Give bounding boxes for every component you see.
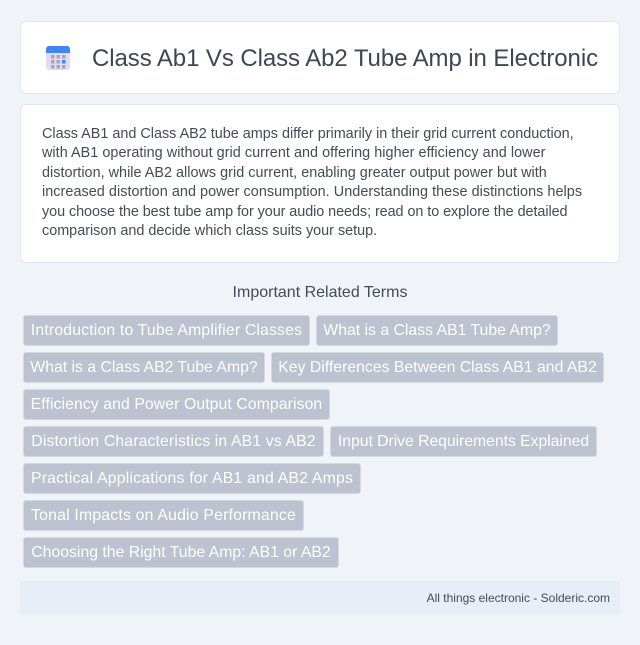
related terms tags: What is a Class AB2 Tube Amp? <box>30 359 258 376</box>
related terms tags: What is a Class AB1 Tube Amp? <box>323 322 551 339</box>
icon: calendar <box>46 46 70 70</box>
related terms tags: Choosing the Right Tube Amp: AB1 or AB2 <box>31 544 331 561</box>
intro text <box>42 126 582 239</box>
title card <box>20 21 620 94</box>
related terms tags: Key Differences Between Class AB1 and AB2 <box>278 359 597 376</box>
intro text: Class AB1 and Class AB2 tube amps differ primarily in their grid current conduction, <box>42 126 574 142</box>
intro text panel <box>20 104 620 263</box>
related terms tags: Distortion Characteristics in AB1 vs AB2 <box>31 433 316 450</box>
title: Class Ab1 Vs Class Ab2 Tube Amp in Electronic <box>92 45 598 72</box>
related terms tags: Input Drive Requirements Explained <box>338 433 589 450</box>
related terms tags: Practical Applications for AB1 and AB2 Amps <box>31 470 353 487</box>
related terms tags <box>23 315 604 568</box>
related terms tags: Tonal Impacts on Audio Performance <box>31 507 296 524</box>
intro text: increased distortion and power consumption. Understanding these distinctions helps <box>42 184 582 200</box>
related terms heading: Important Related Terms <box>233 284 407 301</box>
related terms tags: Introduction to Tube Amplifier Classes <box>31 322 302 339</box>
footer text: All things electronic - Solderic.com <box>427 591 610 605</box>
intro text: you choose the best tube amp for your audio needs; read on to explore the detailed <box>42 204 568 220</box>
related terms tags: Efficiency and Power Output Comparison <box>31 396 322 413</box>
intro text: comparison and decide which class suits your setup. <box>42 223 377 239</box>
intro text: with AB1 operating without grid current and offering higher efficiency and lower <box>42 145 545 161</box>
footer bar <box>20 581 620 615</box>
intro text: distortion, while AB2 allows grid current, enabling greater output power but with <box>42 165 547 181</box>
